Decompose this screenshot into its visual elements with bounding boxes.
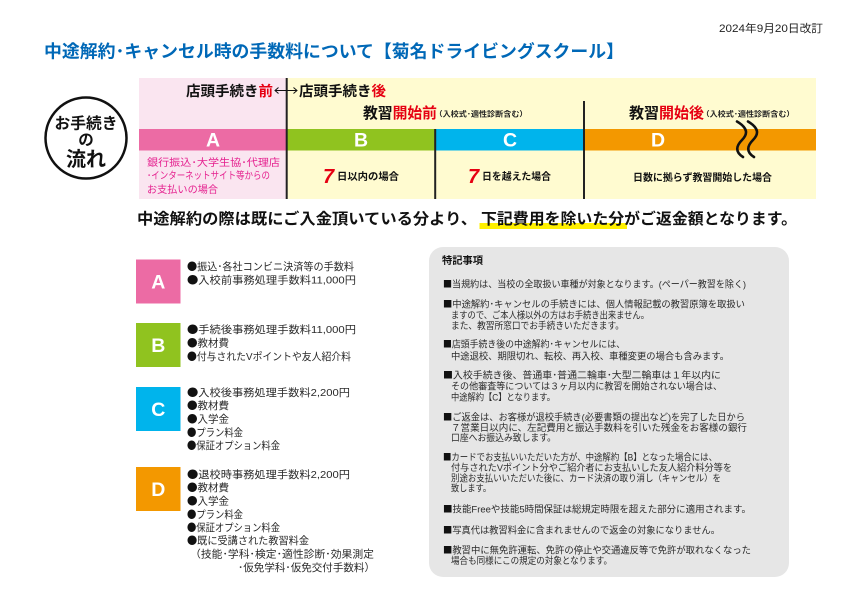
note: who may cancel: また、教習所窓口でお手続きいただきます。 [451,320,624,331]
flow table [139,78,816,199]
band C [435,129,584,152]
revision date: 2024年9月20日改訂 [719,21,823,35]
panel: before store procedure [139,78,287,199]
note: card payment [443,450,732,494]
fee item B: ●手続後事務処理手数料11,000円 [187,322,356,337]
note: refund: 口座へお振込み致します。 [451,432,556,443]
note: card payment: 別途お支払いいただいた後に、カード決済の取り消し（キャンセル）を [451,472,721,484]
band B: B [354,130,368,152]
note: licence loss: 場合も同様にこの規定の対象となります。 [451,555,612,566]
note: refund: ７営業日以内に、左記費用と振込手数料を引いた残金をお客様の銀行 [451,422,747,433]
text: B condition: 日以内の場合 [337,170,399,183]
fee item A [136,259,356,304]
notes heading: 特記事項 [442,254,483,267]
fee item C: ●入学金 [187,412,229,426]
fee item B: B [151,335,165,357]
fee item B [136,322,356,367]
note: photo fee: ■写真代は教習料金に含まれませんので返金の対象になりません。 [443,522,720,536]
heading: before lessons start: （入校式･適性診断含む） [434,110,528,118]
title: 中途解約･キャンセル時の手数料について【菊名ドライビングスクール】 [44,42,624,62]
band B [287,129,435,152]
fee item A: ●入校前事務処理手数料11,000円 [187,272,356,288]
badge: procedure flow: お手続き [54,114,118,132]
fee item D: ･仮免学科･仮免交付手数料） [238,561,375,574]
fee item C: ●入校後事務処理手数料2,200円 [187,385,350,400]
headline: 下記費用を除いた分がご返金額となります。 [481,209,797,228]
fee item D: ●保証オプション料金 [187,520,280,535]
fee item C: ●教材費 [187,398,229,413]
fee item D [136,467,375,574]
fee item D: ●プラン料金 [187,507,243,522]
fee item D: ●既に受講された教習料金 [187,533,309,548]
text: D condition: 日数に拠らず教習開始した場合 [633,171,772,184]
heading: before lessons start [363,104,528,122]
heading: after store procedure: 店頭手続き後 [299,82,387,100]
text: C condition [468,166,551,188]
note: licence loss [443,542,751,566]
heading: after lessons start [629,104,794,122]
text: payment methods for A: 銀行振込･大学生協･代理店 [147,156,280,169]
note: licence loss: ■教習中に無免許運転、免許の停止や交通違反等で免許が取れなくなった [443,542,751,556]
note: time limits: ■入校手続き後、普通車･普通二輪車･大型二輪車は１年以内に [443,368,721,382]
note: card payment: 付与されたVポイント分やご紹介者にお支払いした友人紹介料分等を [451,462,732,473]
note: refund [443,410,747,443]
heading: after lessons start: 教習開始後 [629,104,704,122]
fee item C [136,385,350,453]
heading: before lessons start: 教習開始前 [363,104,437,122]
note: who may cancel [443,296,745,331]
fee item D: ●退校時事務処理手数料2,200円 [187,467,350,482]
text: payment methods for A: お支払いの場合 [147,183,218,196]
panel: after store procedure [287,78,816,199]
note: time limits: その他審査等については３ヶ月以内に教習を開始されない場合は、 [451,380,722,392]
badge: procedure flow: 流れ [66,148,106,171]
fee item D: D [151,479,165,501]
band C: C [503,130,517,152]
band A: A [206,130,220,152]
text: B condition: 7 [323,166,335,188]
note: scope: ■当規約は、当校の全取扱い車種が対象となります。(ペーパー教習を除く) [443,276,746,290]
arrow: before and after [275,88,297,94]
fee item C: ●プラン料金 [187,425,243,440]
text: payment methods for A: ･インターネットサイト等からの [147,169,270,182]
note: who may cancel: ますので、ご本人様以外の方はお手続き出来ません。 [451,310,649,320]
fee item C: C [151,399,165,421]
note: refund: ■ご返金は、お客様が退校手続き(必要書類の提出など)を完了した日から [443,410,745,424]
panel: special notes [429,247,789,577]
band D: D [651,130,665,152]
badge: procedure flow: の [78,132,94,149]
fee item B: ●付与されたVポイントや友人紹介料 [187,349,351,364]
heading: after lessons start: （入校式･適性診断含む） [702,110,794,118]
text: C condition: 7 [468,166,480,188]
heading: before store procedure: 店頭手続き前 [186,82,273,100]
headline [137,209,797,229]
fee item D: ●入学金 [187,494,229,508]
note: after store procedure: 中途退校、期限切れ、転校、再入校、車種変更の場合も含みます。 [451,350,729,362]
fee item B: ●教材費 [187,336,229,350]
note: after store procedure [443,336,729,362]
fee item D: （技能･学科･検定･適性診断･効果測定 [190,548,375,560]
note: time limits [443,368,722,402]
fee item A: ●振込･各社コンビニ決済等の手数料 [187,259,354,274]
note: card payment: ■カードでお支払いいただいた方が、中途解約【B】となった場合には、 [443,450,717,464]
note: skill guarantee: ■技能Freeや技能5時間保証は総規定時限を超えた部分に適用されます。 [443,502,751,516]
note: card payment: 致します。 [451,482,491,494]
headline: 中途解約の際は既にご入金頂いている分より、 [137,209,477,228]
text: B condition [323,166,399,188]
note: time limits: 中途解約【C】となります。 [451,392,555,402]
badge: procedure flow [46,98,126,178]
text: C condition: 日を越えた場合 [482,170,551,183]
fee item A: A [151,272,165,294]
band A [139,129,287,152]
icon: wavy break lines [737,122,757,157]
note: who may cancel: ■中途解約･キャンセルの手続きには、個人情報記載の教習原簿を取扱い [443,296,745,310]
band D [584,129,816,152]
note: after store procedure: ■店頭手続き後の中途解約･キャンセルには、 [443,336,625,350]
text: payment methods for A [147,156,280,196]
fee item D: ●教材費 [187,480,229,495]
fee item C: ●保証オプション料金 [187,438,280,453]
